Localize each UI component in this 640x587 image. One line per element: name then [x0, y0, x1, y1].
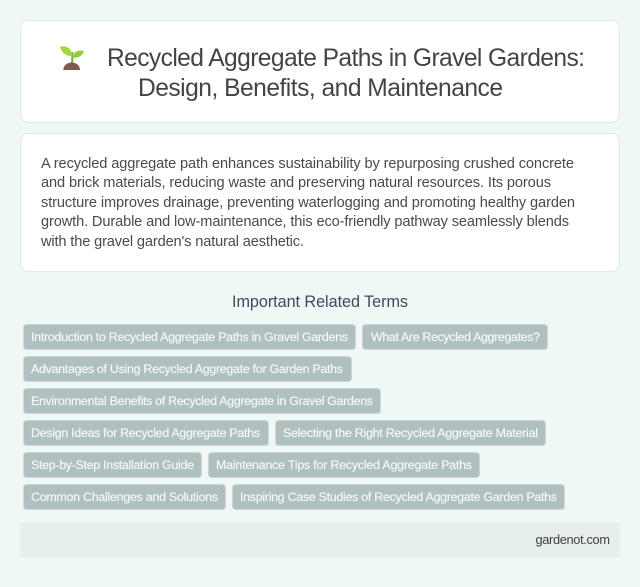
tag: advantages	[24, 356, 352, 382]
heading: important related terms: Important Related Terms	[232, 293, 408, 311]
tag: what are recycled aggregates: What Are Recycled Aggregates?	[371, 330, 540, 344]
description text: with the gravel garden's natural aesthetic.	[40, 234, 304, 250]
icon: seedling	[60, 46, 84, 70]
title: Design, Benefits, and Maintenance	[138, 75, 503, 102]
tag: environmental benefits: Environmental Benefits of Recycled Aggregate in Gravel Gardens	[31, 394, 373, 408]
title: Recycled Aggregate Paths in Gravel Gardens:	[107, 45, 585, 72]
description text	[40, 156, 575, 250]
tag: introduction: Introduction to Recycled Aggregate Paths in Gravel Gardens	[31, 330, 348, 344]
tag: advantages: Advantages of Using Recycled Aggregate for Garden Paths	[31, 362, 343, 376]
tag: selecting material: Selecting the Right Recycled Aggregate Material	[283, 426, 538, 440]
tag: installation guide: Step-by-Step Installation Guide	[31, 458, 194, 472]
tag: selecting material	[276, 420, 546, 446]
panel: header card	[20, 20, 620, 122]
tag: case studies	[232, 484, 564, 510]
panel: description card	[20, 134, 620, 272]
footer	[20, 523, 620, 557]
title	[107, 45, 585, 102]
tag: common challenges	[24, 484, 226, 510]
tag: what are recycled aggregates	[362, 324, 548, 350]
tag: common challenges: Common Challenges and Solutions	[31, 490, 218, 504]
tag: introduction	[24, 324, 356, 350]
footer: gardenot.com	[536, 532, 610, 547]
tag: case studies: Inspiring Case Studies of Recycled Aggregate Garden Paths	[240, 490, 557, 504]
description text: A recycled aggregate path enhances sustainability by repurposing crushed concrete	[41, 156, 574, 172]
tag: design ideas: Design Ideas for Recycled Aggregate Paths	[31, 426, 260, 440]
tag: design ideas	[24, 420, 268, 446]
tag: installation guide	[24, 452, 202, 478]
panel: related term tags	[24, 324, 564, 510]
description text: and brick materials, reducing waste and preserving natural resources. Its porous	[41, 175, 551, 191]
tag: environmental benefits	[24, 388, 380, 414]
description text: structure improves drainage, preventing waterlogging and promoting healthy garden	[41, 195, 575, 211]
tag: maintenance tips: Maintenance Tips for Recycled Aggregate Paths	[216, 458, 472, 472]
tag: maintenance tips	[208, 452, 480, 478]
description text: growth. Durable and low-maintenance, this eco-friendly pathway seamlessly blends	[41, 214, 569, 230]
